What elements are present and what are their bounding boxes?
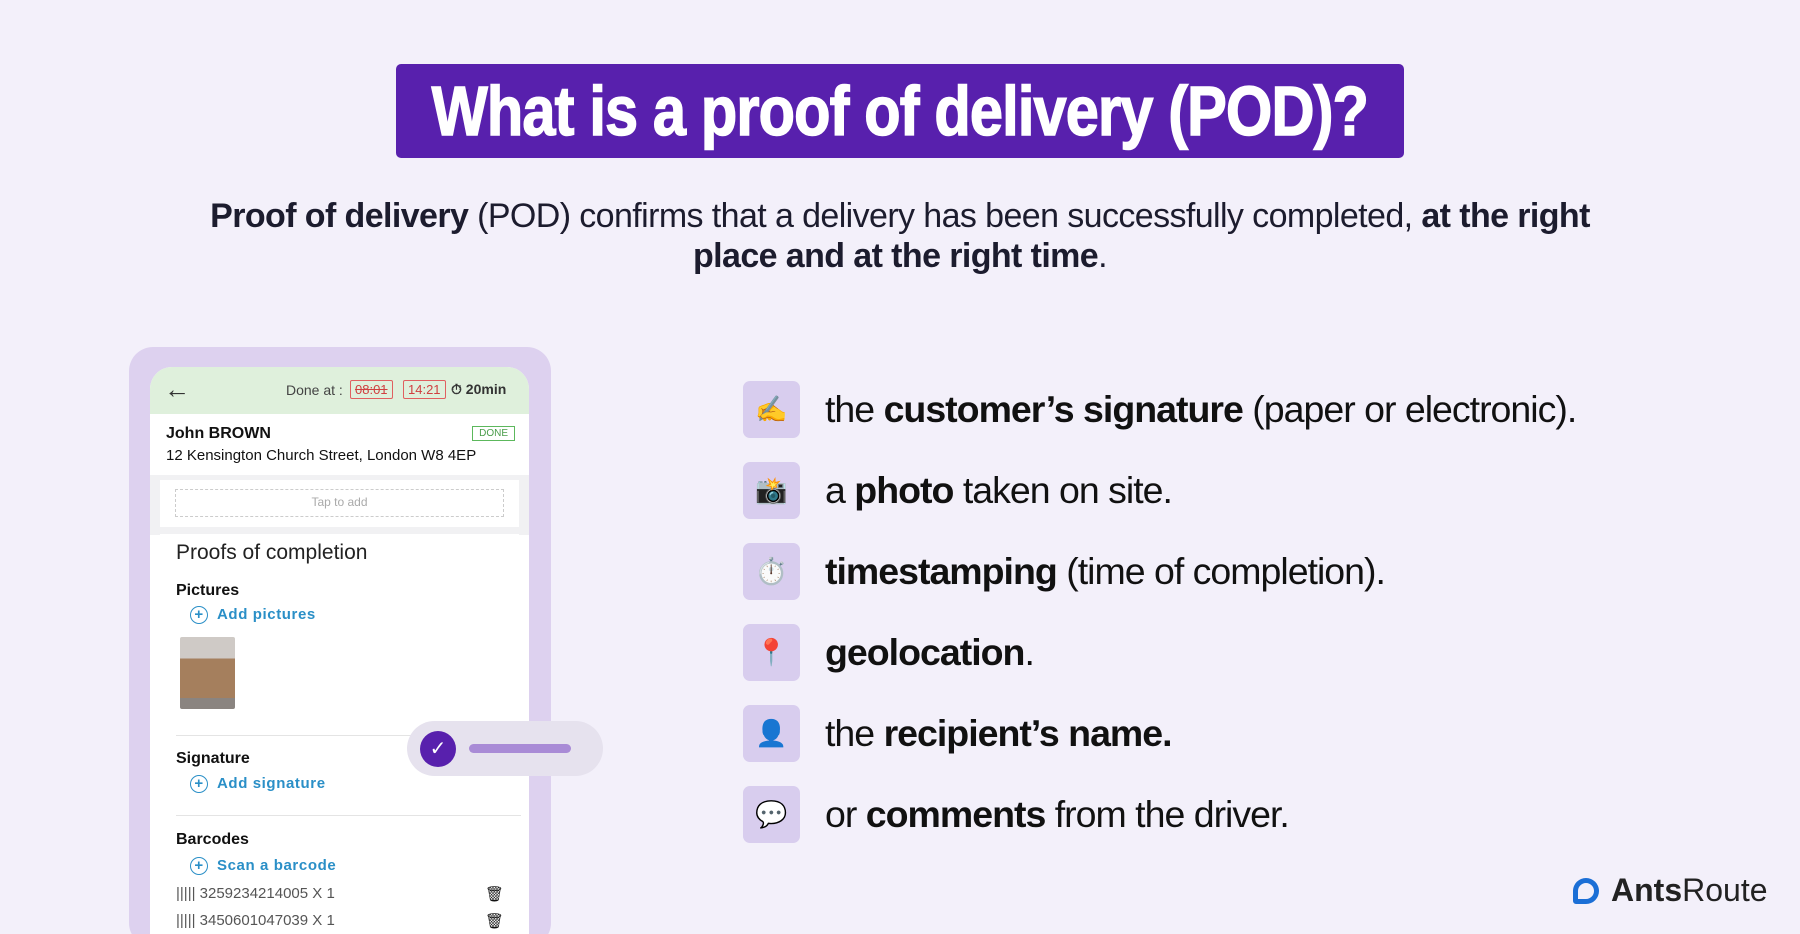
list item: photo: a photo taken on site. bbox=[825, 469, 1172, 511]
title: What is a proof of delivery (POD)? bbox=[432, 72, 1368, 150]
panel: phone background bbox=[129, 347, 551, 934]
list item: recipient: 👤 bbox=[755, 718, 788, 748]
panel: app screen: Add pictures bbox=[217, 606, 316, 623]
panel: app screen: + bbox=[194, 857, 204, 874]
app header: ⏱ 20min bbox=[451, 381, 506, 397]
list item: comments bbox=[743, 786, 1289, 843]
list item: recipient: the recipient’s name. bbox=[825, 712, 1172, 754]
list item: timestamp bbox=[743, 543, 1385, 600]
panel: app screen: + bbox=[194, 606, 204, 623]
proofs of completion: Proofs of completion bbox=[176, 541, 367, 564]
toggle: check pill bbox=[407, 721, 603, 776]
list item: signature: the customer’s signature (paper or electronic). bbox=[825, 388, 1576, 430]
panel: app screen bbox=[150, 367, 529, 934]
photo thumbnail bbox=[180, 637, 235, 709]
toggle: check pill: ✓ bbox=[430, 738, 446, 760]
customer info: 12 Kensington Church Street, London W8 4EP bbox=[166, 447, 476, 464]
customer info: John BROWN bbox=[166, 425, 271, 442]
app header: Done at : bbox=[286, 382, 343, 398]
subtitle text bbox=[210, 197, 1590, 275]
list item: recipient bbox=[743, 705, 1172, 762]
tap to add bbox=[160, 480, 519, 527]
app header: ← bbox=[164, 374, 190, 404]
list item: photo: 📸 bbox=[755, 475, 788, 505]
list item: signature bbox=[743, 381, 1576, 438]
customer info bbox=[166, 425, 515, 464]
app header: 08:01 bbox=[355, 382, 388, 397]
customer info: DONE bbox=[479, 428, 508, 439]
panel: app screen: 🗑 bbox=[485, 913, 504, 930]
panel: app screen: Add signature bbox=[217, 775, 326, 792]
panel: app screen: ||||| 3450601047039 X 1 bbox=[176, 912, 335, 929]
panel: app screen: ||||| 3259234214005 X 1 bbox=[176, 885, 335, 902]
panel: app screen: + bbox=[194, 775, 204, 792]
list item: geolocation: geolocation. bbox=[825, 631, 1034, 673]
panel: app screen: 🗑 bbox=[485, 886, 504, 903]
logo: AntsRoute: AntsRoute bbox=[1611, 872, 1768, 908]
subtitle text: Proof of delivery (POD) confirms that a delivery has been successfully completed, at the right bbox=[210, 197, 1590, 235]
list item: comments: or comments from the driver. bbox=[825, 793, 1289, 835]
panel: app screen: Barcodes bbox=[176, 831, 249, 848]
panel: app screen: Signature bbox=[176, 750, 250, 767]
list item: photo bbox=[743, 462, 1172, 519]
panel: app screen: Scan a barcode bbox=[217, 857, 336, 874]
list item: timestamp: ⏱️ bbox=[755, 556, 788, 586]
subtitle text: place and at the right time. bbox=[693, 237, 1107, 275]
panel: app screen: Tap to add bbox=[311, 495, 368, 509]
list item: timestamp: timestamping (time of completion). bbox=[825, 550, 1385, 592]
list item: geolocation: 📍 bbox=[755, 637, 788, 667]
app header bbox=[150, 367, 529, 414]
list item: geolocation bbox=[743, 624, 1034, 681]
app header: 14:21 bbox=[408, 382, 441, 397]
panel: app screen: Pictures bbox=[176, 582, 239, 599]
list item: signature: ✍️ bbox=[755, 394, 788, 424]
list item: comments: 💬 bbox=[755, 799, 788, 829]
